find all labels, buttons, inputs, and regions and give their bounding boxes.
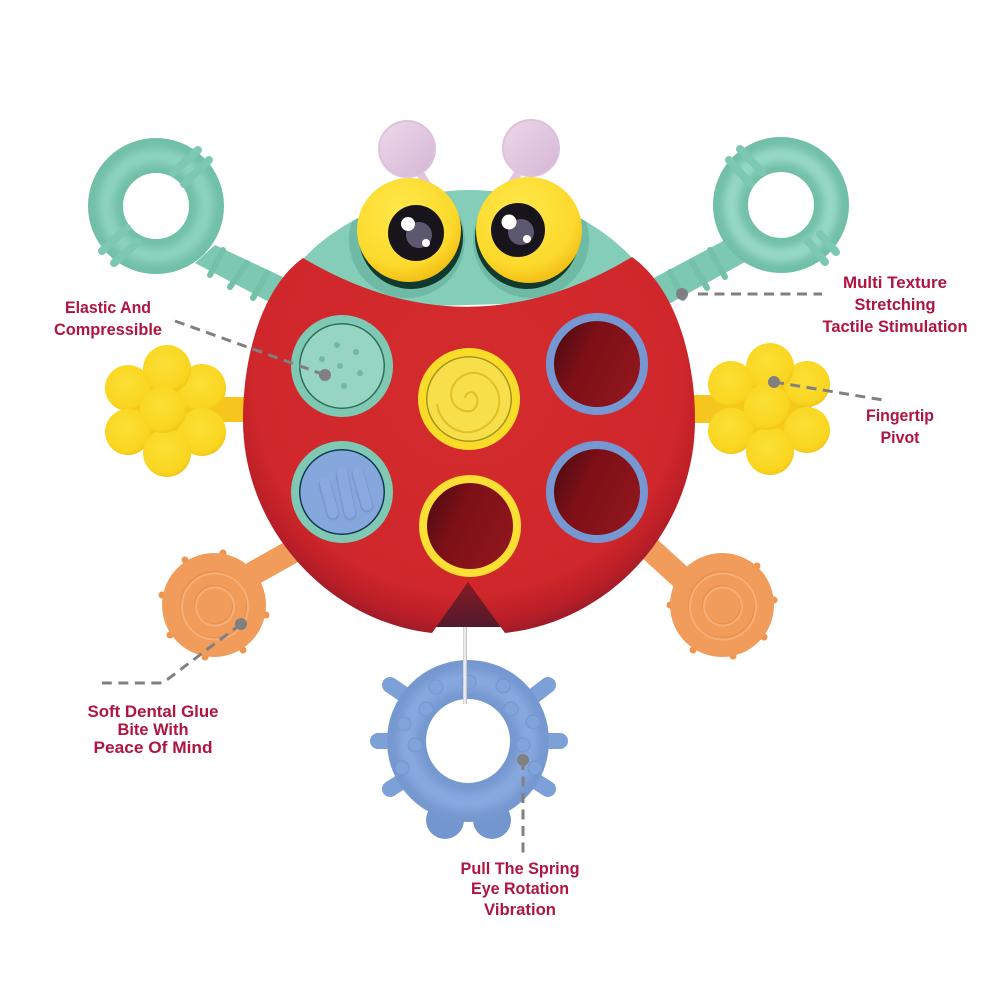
callout: elastic and compressible: Compressible	[54, 321, 162, 339]
callout: pull the spring	[460, 754, 580, 919]
callout: pull the spring: Vibration	[484, 901, 556, 919]
callout: multi texture: Stretching	[854, 296, 936, 314]
callout: elastic and compressible	[54, 299, 331, 381]
callout: soft dental glue: Bite With	[118, 721, 188, 739]
callout: soft dental glue: Peace Of Mind	[94, 739, 212, 757]
icon: yellow spiral button	[418, 348, 520, 450]
ladybug red body	[243, 257, 695, 633]
icon: left yellow flower grip	[105, 345, 248, 477]
icon: left eye	[357, 178, 461, 282]
callout: fingertip pivot: Pivot	[880, 429, 920, 447]
callout: elastic and compressible: Elastic And	[65, 299, 151, 317]
icon: yellow ring hole	[423, 479, 517, 573]
icon: left orange teether	[158, 546, 302, 660]
icon: notch behind body	[428, 575, 510, 627]
icon: pull string	[463, 622, 467, 704]
icon: blue pull ring	[378, 660, 560, 839]
icon: teal dotted button	[291, 315, 393, 417]
callout: soft dental glue: Soft Dental Glue	[88, 703, 218, 721]
icon: blue ring hole top right	[550, 317, 644, 411]
callout: multi texture: Tactile Stimulation	[822, 318, 968, 336]
icon: blue ring hole lower right	[550, 445, 644, 539]
icon: left teal ring handle	[102, 150, 285, 305]
callout: multi texture	[676, 274, 968, 336]
icon: right orange teether	[640, 540, 778, 660]
callout: multi texture: Multi Texture	[843, 274, 947, 292]
callout: pull the spring: Pull The Spring	[460, 860, 580, 878]
ladybug head	[304, 190, 632, 306]
callout: fingertip pivot	[768, 376, 934, 447]
callout: pull the spring: Eye Rotation	[471, 880, 569, 898]
icon: right teal ring handle	[650, 149, 836, 305]
callout: soft dental glue	[88, 618, 247, 757]
icon: right eye	[476, 177, 582, 283]
icon: blue striped button	[291, 441, 393, 543]
icon: antennae	[379, 120, 559, 186]
icon: right yellow flower grip	[690, 343, 830, 475]
callout: fingertip pivot: Fingertip	[866, 407, 934, 425]
